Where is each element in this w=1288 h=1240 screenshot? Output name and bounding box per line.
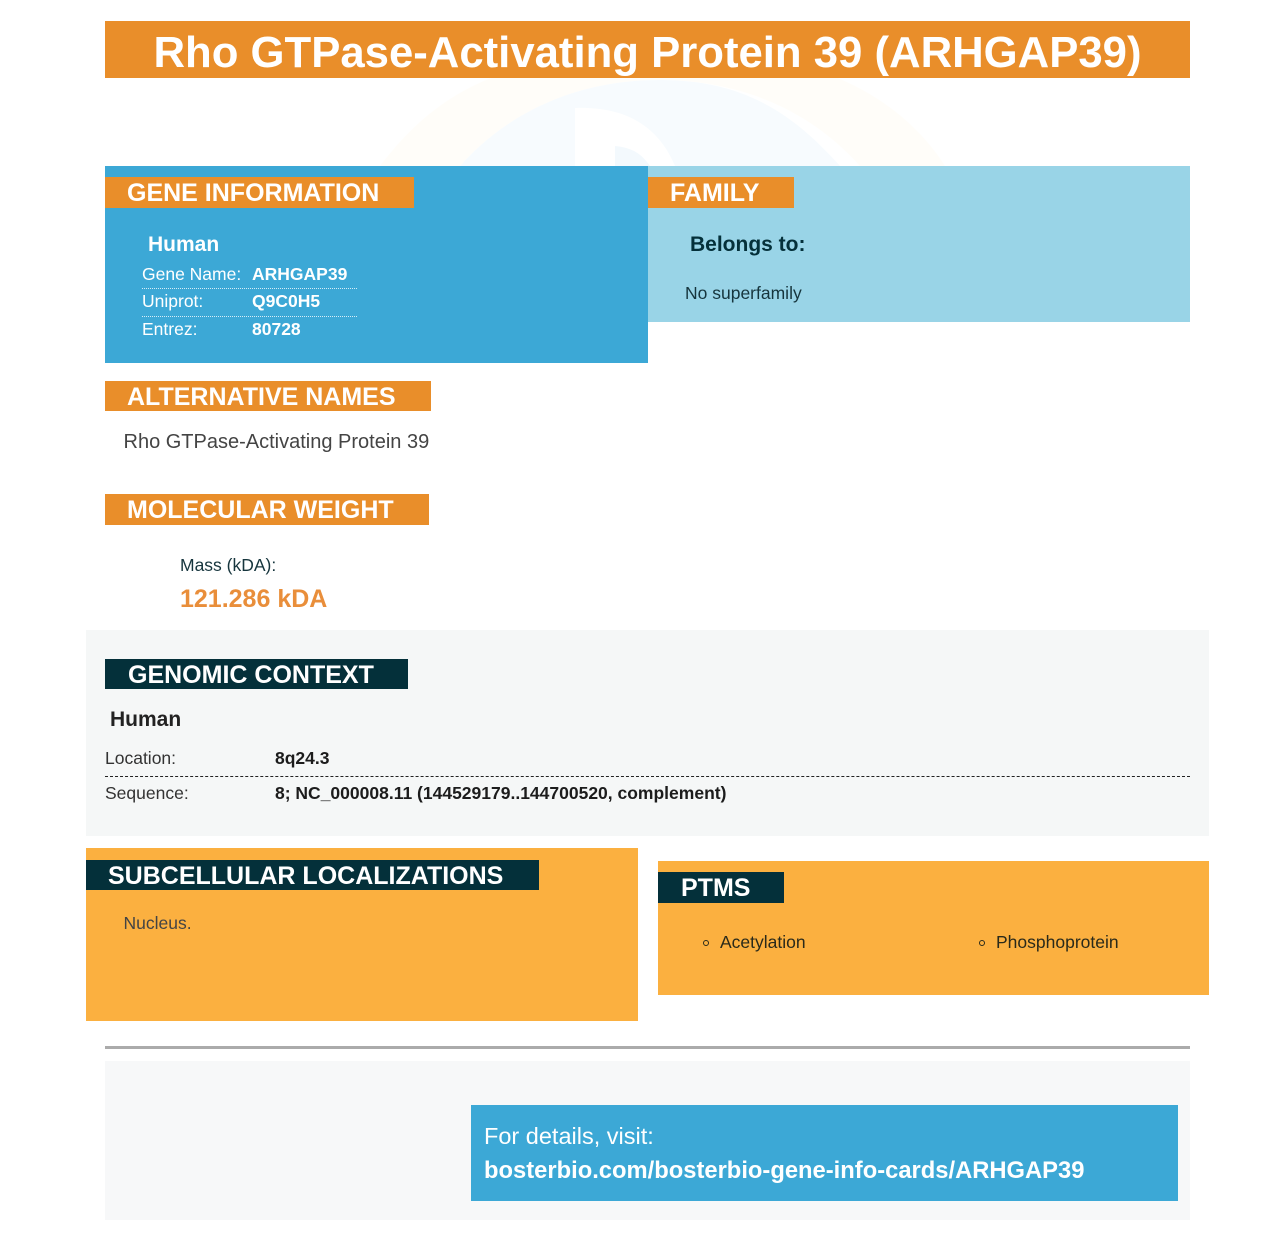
panel: molecular weight: [105, 494, 429, 613]
species label: Human: [110, 708, 181, 731]
title banner: Rho GTPase-Activating Protein 39 (ARHGAP39): [153, 28, 1142, 77]
background watermark logo: [615, 146, 650, 166]
species label: Human: [148, 233, 219, 256]
ptm: phosphoprotein: Phosphoprotein: [996, 932, 1119, 952]
heading: molecular weight: MOLECULAR WEIGHT: [127, 496, 394, 524]
heading: ptms: [658, 872, 784, 903]
localization text: Nucleus.: [124, 913, 192, 933]
heading: family: FAMILY: [670, 179, 759, 207]
panel: gene information: [105, 166, 648, 363]
entrez row: [142, 319, 301, 339]
panel: subcellular localizations: [86, 848, 638, 1021]
panel: footer: [105, 1061, 1190, 1220]
uniprot row: Q9C0H5: [252, 291, 320, 311]
uniprot row: [142, 290, 357, 317]
horizontal rule: [105, 1046, 1190, 1049]
panel: ptms: [658, 861, 1209, 995]
mass label: Mass (kDA):: [180, 555, 276, 575]
location row: [105, 744, 1190, 777]
callout url: bosterbio.com/bosterbio-gene-info-cards/ARHGAP39: [484, 1157, 1084, 1184]
panel: family: [648, 166, 1190, 322]
heading: gene information: GENE INFORMATION: [127, 179, 379, 207]
heading: subcellular localizations: SUBCELLULAR LOCALIZATIONS: [108, 862, 503, 890]
entrez row: Entrez:: [142, 319, 197, 339]
panel: alternative names: [105, 381, 431, 453]
callout label: For details, visit:: [484, 1123, 654, 1149]
gene name row: ARHGAP39: [252, 264, 347, 284]
panel: genomic context: [86, 630, 1209, 836]
mass value: 121.286 kDA: [180, 585, 327, 613]
superfamily text: No superfamily: [685, 283, 802, 303]
location row: Location:: [105, 748, 176, 768]
callout: details link: [471, 1105, 1178, 1201]
heading: alternative names: ALTERNATIVE NAMES: [127, 383, 396, 411]
location row: 8q24.3: [275, 748, 329, 768]
ptm: acetylation: Acetylation: [720, 932, 806, 952]
heading: family: [648, 177, 794, 208]
uniprot row: Uniprot:: [142, 291, 203, 311]
heading: genomic context: GENOMIC CONTEXT: [128, 661, 374, 689]
sequence row: Sequence:: [105, 783, 189, 803]
gene name row: Gene Name:: [142, 264, 241, 284]
entrez row: 80728: [252, 319, 301, 339]
belongs to label: Belongs to:: [690, 233, 806, 256]
heading: ptms: PTMS: [681, 874, 750, 902]
gene name row: [142, 263, 357, 289]
sequence row: 8; NC_000008.11 (144529179..144700520, complement): [275, 783, 726, 803]
alternative name text: Rho GTPase-Activating Protein 39: [124, 431, 429, 453]
